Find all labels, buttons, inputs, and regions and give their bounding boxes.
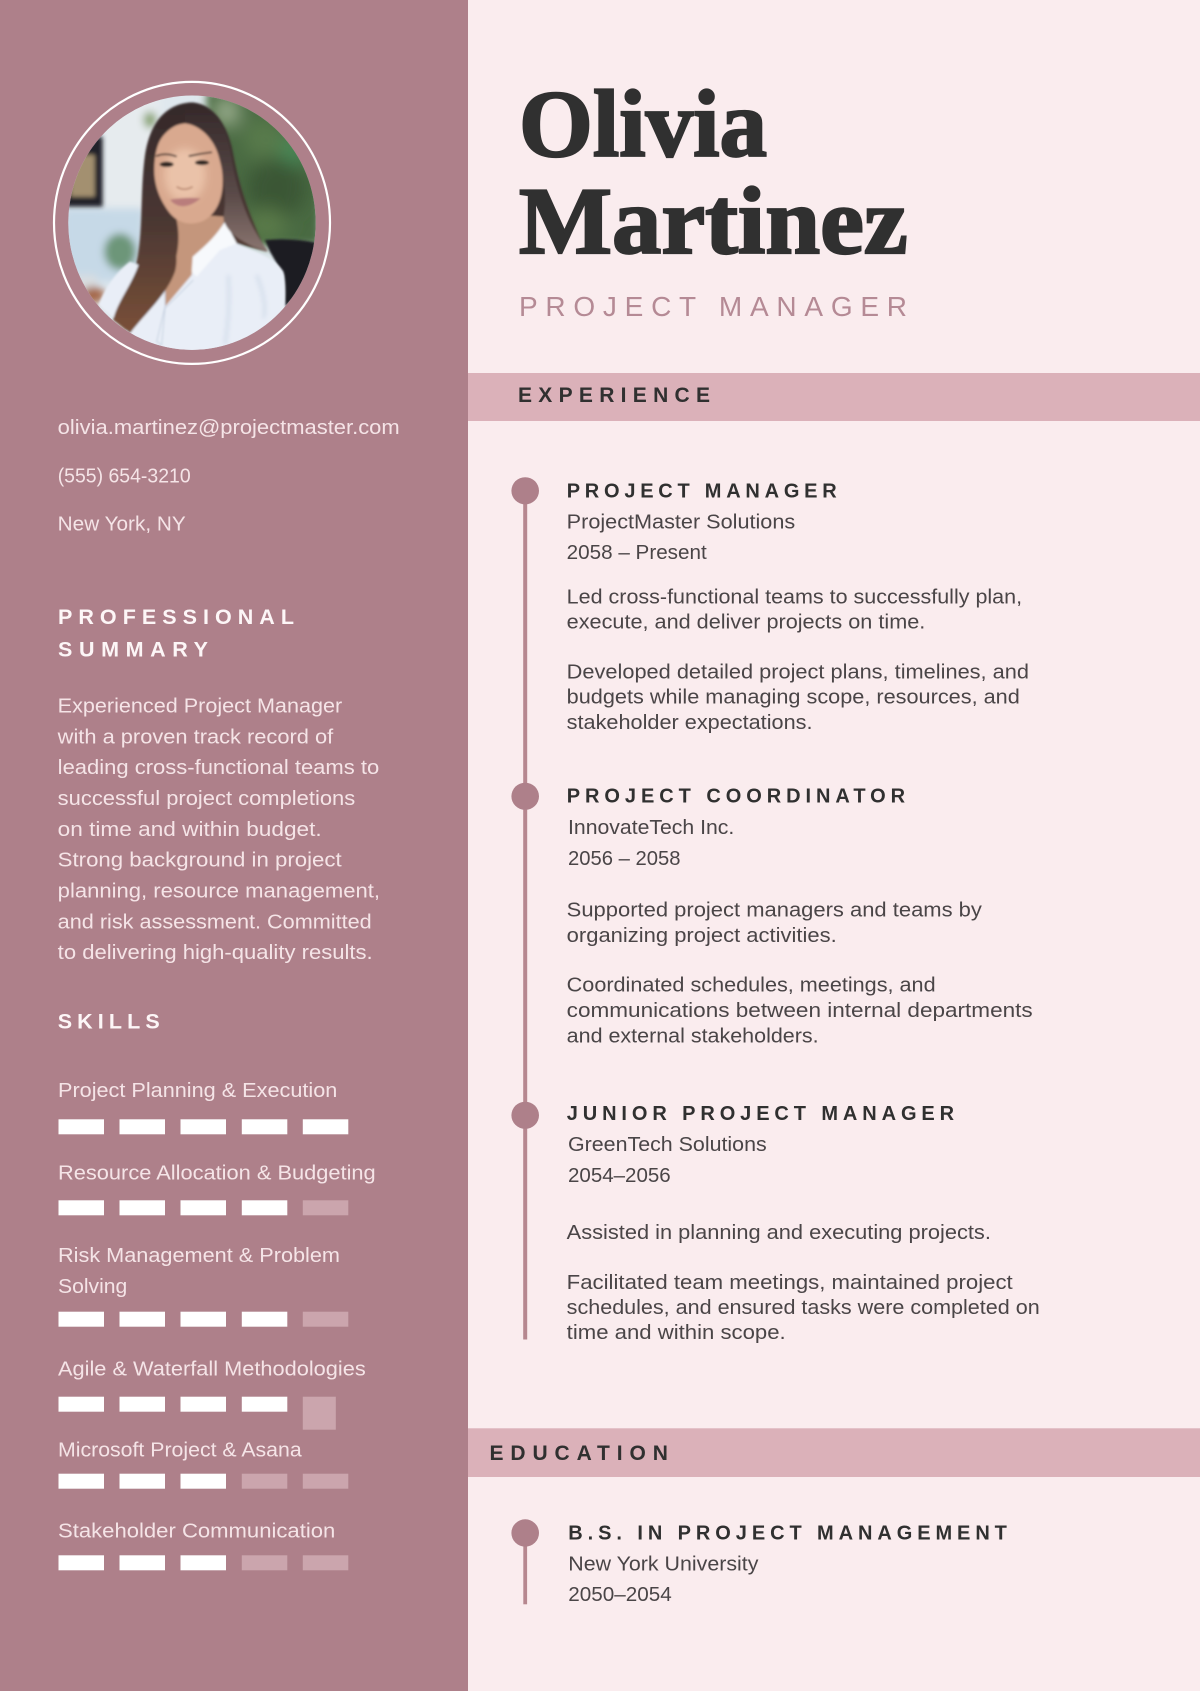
title: name: Martinez — [519, 168, 908, 274]
collar — [192, 221, 237, 277]
job: project manager — [567, 480, 1029, 734]
job: project manager: budgets while managing scope, resources, and — [567, 687, 1020, 709]
portrait — [68, 96, 316, 350]
skill: microsoft project: Microsoft Project & Asana — [58, 1440, 303, 1462]
job: junior project manager: time and within scope. — [567, 1322, 786, 1344]
skill: resource allocation: Resource Allocation & Budgeting — [58, 1162, 376, 1184]
skill: risk management — [58, 1245, 348, 1327]
job: junior project manager: Facilitated team meetings, maintained project — [567, 1272, 1013, 1294]
education entry: 2050–2054 — [568, 1584, 672, 1606]
job: junior project manager — [567, 1103, 1040, 1344]
heading: professional summary — [58, 605, 294, 662]
phone: (555) 654-3210 — [58, 466, 191, 488]
back hair — [113, 102, 267, 337]
heading: professional summary: SUMMARY — [58, 638, 208, 662]
skill: risk management: Risk Management & Problem — [58, 1245, 340, 1267]
text block: summary — [57, 695, 380, 964]
timeline: education — [511, 1519, 539, 1604]
job: project coordinator: and external stakeholders. — [567, 1025, 819, 1047]
job: project coordinator: Coordinated schedules, meetings, and — [567, 975, 936, 997]
text block: summary: leading cross-functional teams to — [58, 757, 379, 779]
face — [154, 123, 223, 224]
job: project coordinator: InnovateTech Inc. — [568, 817, 734, 839]
job: project coordinator: 2056 – 2058 — [568, 848, 680, 870]
job: project coordinator: PROJECT COORDINATOR — [567, 786, 906, 808]
front hair right — [187, 122, 268, 252]
timeline: experience — [511, 477, 539, 1340]
job: project manager: Led cross-functional teams to successfully plan, — [567, 586, 1022, 608]
section band: education — [468, 1428, 1200, 1477]
skill: stakeholder communication: Stakeholder Communication — [58, 1520, 335, 1542]
job: project manager: Developed detailed project plans, timelines, and — [567, 661, 1029, 683]
title: name: Olivia — [519, 71, 767, 177]
mouth — [170, 198, 201, 206]
chair — [265, 239, 315, 307]
email: olivia.martinez@projectmaster.com — [58, 417, 400, 439]
section band: education: EDUCATION — [490, 1442, 668, 1465]
profile photo — [54, 82, 330, 375]
person — [98, 100, 287, 350]
skill: stakeholder communication — [58, 1520, 348, 1570]
text block: summary: successful project completions — [58, 788, 355, 810]
job: junior project manager: Assisted in planning and executing projects. — [567, 1222, 991, 1244]
job: project manager: PROJECT MANAGER — [567, 480, 837, 502]
front hair left — [112, 124, 178, 334]
subtitle: role: PROJECT MANAGER — [519, 291, 907, 322]
job: project coordinator: Supported project managers and teams by — [567, 900, 982, 922]
contact details — [58, 417, 400, 536]
brows — [157, 152, 211, 156]
heading: professional summary: PROFESSIONAL — [58, 605, 294, 629]
section band: experience — [468, 373, 1200, 421]
text block: summary: Experienced Project Manager — [58, 695, 343, 717]
text block: summary: and risk assessment. Committed — [58, 911, 372, 933]
text block: summary: to delivering high-quality results. — [58, 942, 373, 964]
panel: left sidebar — [0, 0, 468, 1691]
skill: risk management: Solving — [58, 1276, 127, 1298]
section band: experience: EXPERIENCE — [518, 384, 710, 407]
job: project coordinator — [567, 786, 1033, 1047]
text block: summary: on time and within budget. — [58, 819, 322, 841]
title: name — [519, 71, 908, 274]
skill: project planning: Project Planning & Execution — [58, 1080, 337, 1102]
job: project coordinator: communications between internal departments — [567, 1000, 1033, 1022]
heading: skills: SKILLS — [58, 1009, 160, 1033]
skill: agile and waterfall: Agile & Waterfall Methodologies — [58, 1358, 366, 1380]
education entry: B.S. IN PROJECT MANAGEMENT — [568, 1522, 1007, 1544]
job: project manager: ProjectMaster Solutions — [567, 511, 795, 533]
education entry — [568, 1522, 1007, 1606]
job: junior project manager: GreenTech Solutions — [568, 1134, 767, 1156]
nose — [177, 187, 193, 189]
location: New York, NY — [58, 514, 186, 536]
education entry: New York University — [568, 1553, 758, 1575]
job: project manager: stakeholder expectations. — [567, 712, 812, 734]
skill: microsoft project — [58, 1440, 348, 1489]
job: junior project manager: JUNIOR PROJECT MANAGER — [567, 1103, 955, 1125]
job: junior project manager: 2054–2056 — [568, 1165, 671, 1187]
skill: resource allocation — [58, 1162, 376, 1215]
eyes — [160, 162, 174, 167]
job: project manager: 2058 – Present — [567, 542, 707, 564]
text block: summary: planning, resource management, — [58, 881, 380, 903]
skills list — [58, 1080, 376, 1570]
shirt — [98, 242, 287, 350]
text block: summary: with a proven track record of — [57, 726, 334, 748]
skill: project planning — [58, 1080, 348, 1134]
job: project coordinator: organizing project activities. — [567, 925, 837, 947]
photo ring — [54, 82, 330, 364]
neck and chest — [164, 213, 225, 307]
skill: agile and waterfall — [58, 1358, 366, 1430]
job: junior project manager: schedules, and ensured tasks were completed on — [567, 1297, 1040, 1319]
job: project manager: execute, and deliver projects on time. — [567, 612, 925, 634]
text block: summary: Strong background in project — [58, 850, 342, 872]
